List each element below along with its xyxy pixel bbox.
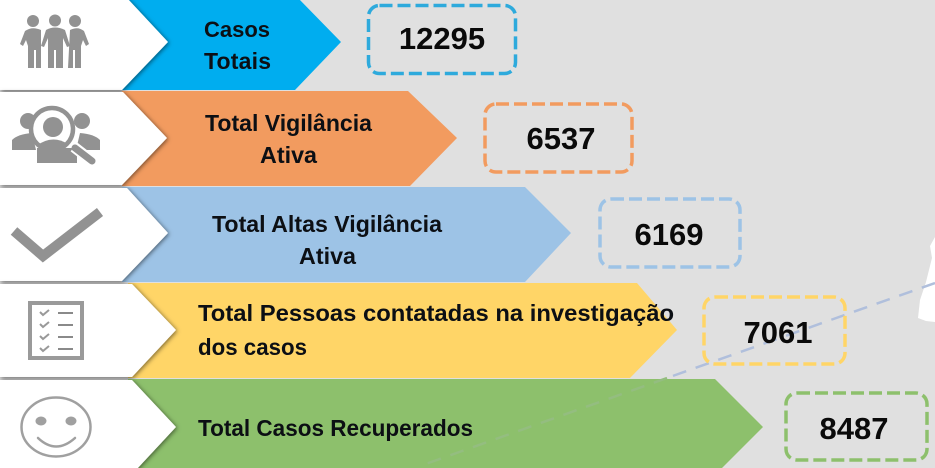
row 5: arrow recuperados	[128, 379, 763, 468]
panel: vigilancia icon	[0, 92, 167, 185]
label: casos totais: Totais	[204, 48, 271, 74]
label: vigilancia: Ativa	[260, 142, 317, 168]
value: 6537	[485, 104, 632, 172]
arrow: pessoas	[128, 283, 677, 378]
label: altas: Total Altas Vigilância	[212, 211, 442, 237]
label: recuperados: Total Casos Recuperados	[198, 415, 473, 441]
panel: casos icon	[0, 0, 168, 90]
label: altas	[212, 211, 442, 269]
value: 7061	[704, 297, 845, 364]
map fragment	[918, 237, 935, 322]
value: 12295	[368, 6, 516, 74]
value: 8487	[786, 393, 927, 460]
panel: pessoas icon	[0, 284, 176, 377]
icon: checklist	[30, 303, 82, 358]
icon: check mark	[14, 212, 100, 256]
label: altas: Ativa	[299, 243, 356, 269]
row 4: pessoas contatadas	[0, 283, 677, 378]
panel: altas icon	[0, 188, 168, 281]
icon: magnifier over people	[12, 108, 100, 163]
row 1: casos totais	[0, 0, 516, 90]
value: 6537: 6537	[527, 121, 595, 156]
value: 12295: 12295	[399, 21, 485, 56]
label: pessoas: Total Pessoas contatadas na investigação	[198, 300, 674, 326]
arrow: casos totais	[122, 0, 341, 90]
value: 6169	[600, 199, 740, 267]
panel: recuperados icon	[0, 380, 176, 468]
row 2: vigilancia ativa	[0, 91, 632, 186]
icon: smiley	[22, 398, 90, 456]
label: casos totais	[204, 17, 271, 74]
value: 8487: 8487	[820, 411, 888, 446]
arrow: vigilancia	[122, 91, 457, 186]
arrow: altas	[122, 187, 571, 282]
icon: people	[20, 14, 89, 68]
dashed map line	[420, 283, 935, 466]
label: vigilancia	[205, 110, 372, 168]
value: 6169: 6169	[635, 217, 703, 252]
label: pessoas: dos casos	[198, 334, 307, 360]
value: 7061: 7061	[744, 315, 812, 350]
label: casos totais: Casos	[204, 17, 270, 42]
label: vigilancia: Total Vigilância	[205, 110, 372, 136]
row 3: altas	[0, 187, 740, 282]
label: pessoas	[198, 300, 674, 360]
